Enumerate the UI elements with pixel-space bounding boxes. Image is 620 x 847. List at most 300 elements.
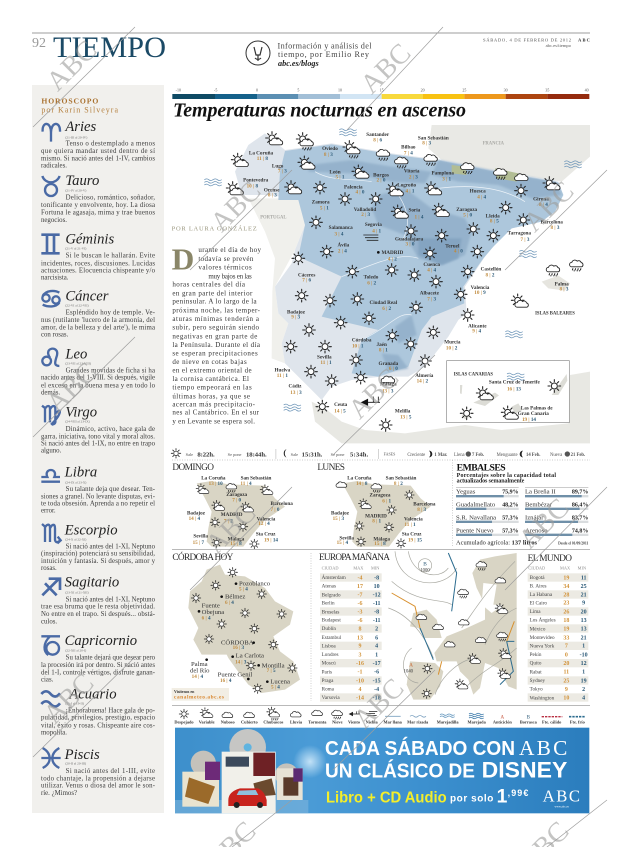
city labels north: Orense [264,188,280,194]
town labels: Palma [191,661,208,668]
table header: MAX [560,565,571,570]
legend labels: Variable [199,719,215,724]
entry: Sagitario: trae esa bruma que le resta objetividad. [41,604,155,611]
table rows: 6 [375,635,378,641]
reservoir bars: La Breña II [525,489,556,496]
city labels: Barcelona [413,502,436,508]
entry: Libra: (24-IX al 23-X) [65,480,86,484]
subheading: Porcentajes sobre la capacidad total [457,473,556,479]
table rows: 1 [582,644,585,650]
legend icons: B [527,715,531,720]
pressure labels: A [409,662,413,668]
table rows: 0 [565,652,568,658]
table rows: 11 [564,670,569,676]
article text: aturas mínimas tenderán a [172,315,259,323]
table rows: 1 [582,670,585,676]
table rows: 20 [581,609,587,615]
table rows: 13 [357,635,363,641]
city labels: 8 | 1 [372,519,382,525]
watermarks: ABC [518,176,580,238]
table rows: Ámsterdam [322,573,346,581]
reservoir bars: 74,8% [572,528,588,534]
date line: ABC [578,38,590,42]
ad headline [325,736,568,783]
city labels: Badajoz [187,510,206,516]
panel: Domingo forecast [172,463,293,549]
land: France [428,125,590,182]
table rows: 10 [563,696,569,702]
reservoir bars: 83,7% [572,516,588,522]
panel: Europa mañana table [319,551,390,702]
table rows: Washington [530,695,555,701]
town labels: 6 | 4 [225,600,234,606]
article text: peninsular. A lo largo de la [172,298,257,306]
ad offer [326,786,528,807]
entry: Géminis: incidentes, roces, discusiones. Lucidas [41,260,155,267]
town labels: del Río [190,668,210,675]
legend icons [179,707,585,720]
town labels: Lucena [270,678,290,685]
table rows: 10 [374,584,380,590]
city labels [331,475,436,547]
table rows: Dublín [322,626,336,632]
city labels: Sta Cruz [402,532,422,538]
city labels south: Almería [415,373,434,379]
city labels: 7 | 2 [224,518,233,524]
table rows: 26 [563,609,569,615]
panel: Disney advertisement [175,728,589,813]
city labels: 8 | 2 [394,481,403,487]
temperature colour scale [172,87,589,99]
entry: Aries: mismo. Si nació antes del 1-IV, cambios [41,155,155,162]
city labels north: 7 | 4 [404,150,413,156]
entry: Piscis: ríe. ¿Mimos? [41,790,77,797]
table header: MIN [578,565,587,570]
legend labels: Cubierto [241,719,258,724]
heading: DOMINGO [172,463,214,473]
city labels: 13 | 10 [209,481,223,487]
city labels north: Guadalajara [395,237,423,243]
city labels north: Burgos [373,173,389,179]
city labels: La Coruña [201,475,226,481]
entry: Tauro: Tauro [65,173,99,189]
inset: Canary Islands [447,361,569,423]
moon phases: 21 Feb. [571,453,585,458]
sun and moon bar [171,449,585,459]
city labels south: Castellón [481,266,501,272]
legend labels: Fte. cálido [542,719,561,724]
entry: Aries: Tenso o destemplado a menos [66,140,155,147]
city labels south: 8 | 3 [560,287,569,293]
city labels north: 8 | 4 [539,202,548,208]
map [197,481,285,547]
entry: Sagitario: Si nació antes del 1-XI, Neptuno [66,596,156,603]
entry: Escorpio: Si nació antes del 1-XI, Neptuno [66,544,156,551]
city labels south: Ciudad Real [370,300,398,306]
city labels north: 4 | 0 [356,189,365,195]
table rows: 13 [581,618,587,624]
entry: Escorpio: intuición y fantasía. Si después, amor y [41,558,156,565]
city labels: MADRID [365,513,387,519]
ad headline: DISNEY [482,758,568,783]
entry: Piscis: utilizar. Venus o diosa del amor le son- [41,783,156,790]
city labels north: 5 | 1 [320,205,329,211]
temperature colour scale: 15 [380,87,384,92]
city labels south: Valencia [471,285,490,291]
city labels north: 8 | 6 [373,138,383,144]
entry: Géminis: actuaciones. Elocuencia chispeante y/o [41,268,156,275]
table rows: Sydney [530,678,546,684]
city labels north: 3 | 1 [442,177,452,183]
entry: Leo: nacido antes del 1-VIII. Si después, vigile [41,375,155,382]
reservoir bars: Bembézar [525,501,553,508]
entry: Acuario: (21-I al 19-II) [65,701,84,705]
article text: de nieve en cotas bajas [172,358,247,366]
table rows: 19 [563,575,569,581]
table rows: Varsovia [322,695,340,701]
weather legend [174,707,585,724]
ad offer: Libro + CD Audio [326,789,447,806]
entry: Acuario: vital, éxito y rosas. Chispeante aire cos- [41,722,156,729]
city labels south: MADRID [381,250,403,256]
city labels: Málaga [228,536,245,542]
article text: todavía se prevén [198,255,254,263]
inset: Canary Islands: Santa Cruz de Tenerife [489,380,540,386]
reservoir bars: 48,2% [502,502,519,508]
table rows: B. Aires [530,584,547,590]
city labels north: La Coruña [249,150,274,156]
legend labels: Nieve [332,719,343,724]
table header: MIN [371,565,380,570]
table rows: La Habana [530,592,553,598]
reservoir bars: Puente Nuevo [456,527,494,534]
temperature colour scale: 10 [338,87,342,92]
arrow: wind [362,397,380,405]
table rows: México [530,626,546,632]
heading: CÓRDOBA HOY [172,551,234,563]
city labels south: 11 | 1 [320,360,332,366]
entry: Virgo: Dinámico, activo, hace gala de [66,426,155,433]
city labels north: Soria [408,208,421,214]
city labels north: 4 | 1 [406,188,415,194]
table rows: 9 [565,687,568,693]
table rows: Los Ángeles [530,616,556,624]
table rows: Montevideo [530,635,555,641]
temperature zone: main [278,144,563,377]
temperature colour scale: 20 [421,87,425,92]
city labels north: Segovia [365,222,382,228]
table rows: 9 [582,601,585,607]
city labels: Málaga [373,536,390,542]
reservoir bars: 57,3% [502,528,519,534]
city labels north: 10 | 8 [247,183,258,189]
entry: Virgo [41,405,156,455]
date line [483,38,590,48]
city labels south: 9 | 3 [291,315,301,321]
city labels: 15 | 8 [374,541,386,547]
ad headline: CADA SÁBADO CON [325,737,515,760]
city labels: 11 | 4 [240,481,252,487]
table rows: 2 [582,687,585,693]
callout: website: canalmeteo.abc.es [174,695,224,701]
city labels north: Palencia [344,184,363,190]
table rows: 12 [581,661,587,667]
table rows: 20 [563,661,569,667]
entry: Aries: que quiera mandar usted dentro de sí [41,148,155,155]
article text: nes al Cantábrico. En el sur [172,409,260,417]
table header: CIUDAD [528,565,545,570]
city labels south: 4 | 2 [388,256,397,262]
table rows: Rabat [530,669,542,675]
city labels: 14 | 4 [189,516,200,522]
city labels north: 8 | 3 [551,225,560,231]
entry: Sagitario [41,575,156,625]
city labels north: Ávila [337,241,350,249]
icon: weather blog seal [246,41,270,65]
table rows: 8 [358,626,361,632]
entry: Capricornio: Su talante dejará que desear pero [66,655,156,662]
city labels south: 13 | 3 [290,390,302,396]
watermarks: ABC [41,357,103,419]
city labels north: 2 | 3 [409,174,418,180]
city labels south: Albacete [420,290,440,296]
article text: últimas horas, ya que se [172,392,250,400]
inset: Canary Islands: 19 | 14 [522,417,536,423]
city labels south: Alicante [468,323,487,329]
city labels north: Girona [533,197,549,203]
accumulated rainfall note: Acumulado agrícola: 137 litros [456,539,538,546]
page header [32,32,590,68]
city labels north: Bilbao [401,144,416,150]
legend labels: Mar llana [384,719,403,724]
blog promo text: abc.es/blogs [278,59,319,68]
reservoir bars [456,489,588,536]
entry: Leo: Leo [64,346,87,362]
city labels: 19 | 14 [264,538,278,544]
city labels north: Barcelona [541,219,563,225]
table rows: -7 [357,593,362,599]
entry: Libra: Su talante deja que desear. Ten- [66,486,156,493]
sunrise and sunset: 18:44h. [246,451,267,458]
city labels: 14 | 8 [356,481,368,487]
entry: Tauro: Delicioso, romántico, soñador, [66,195,155,202]
city labels north: Tarragona [508,230,531,236]
weather icons north [204,129,582,242]
town labels: Obejuna [202,609,224,616]
weather icons [196,484,273,549]
table rows: Budapest [322,618,341,624]
table rows: 23 [563,601,569,607]
article [172,225,261,426]
horoscope heading: HOROSCOPO [41,96,99,105]
legend labels [174,719,585,724]
town labels: Puente Genil [218,672,252,679]
ad offer: 1 [497,786,508,807]
moon phases: Nueva [550,453,562,458]
table rows: Berlín [322,601,335,607]
entry: Capricornio: Capricornio [65,633,137,649]
accumulated rainfall note [456,539,589,546]
city labels south: Ceuta [334,402,348,408]
entry: Cáncer: Cáncer [65,289,109,305]
city labels north: 4 | 0 [454,249,463,255]
city labels south: 4 | 4 [427,268,437,274]
sunrise and sunset: 5:34h. [350,451,369,458]
city labels south: 7 | 6 [302,278,312,284]
table rows: El Cairo [530,600,547,606]
city labels north: Salamanca [329,225,353,231]
sunrise and sunset: Sale [291,452,298,457]
blog promo text [278,42,372,68]
table rows [530,575,588,702]
table rows: Praga [322,678,334,684]
city labels south: Cuenca [423,262,440,268]
land: Africa [312,372,590,443]
city labels north: PORTUGAL [260,215,286,220]
table rows: 13 [581,627,587,633]
table rows: Londres [322,652,339,658]
legend labels: Despejado [174,719,194,724]
table rows [322,573,381,701]
entry: Leo: demás. [41,389,60,396]
horoscope heading [41,96,118,114]
legend labels: Nuboso [221,719,235,724]
reservoir bars: Arenoso [525,527,548,534]
city labels: Zaragoza [370,493,391,499]
table rows: Lisboa [322,643,336,649]
watermarks: ABC [41,35,103,97]
panel: Embalses [456,462,589,546]
temperature colour scale: -10 [176,87,181,92]
table rows: 33 [563,635,569,641]
isobars [388,551,517,695]
reservoir bars: Iznájar [525,515,544,522]
city labels south: Toledo [364,274,379,280]
city labels north [243,132,563,255]
table rows: 4 [582,696,585,702]
town labels: 5 | 4 [239,587,248,593]
table rows: Tokyo [530,687,543,693]
city labels: Sta Cruz [256,532,276,538]
town labels: 14 | 3 [235,660,247,666]
banner background [175,728,589,813]
city labels north: 5 | 1 [336,174,345,180]
town labels: 7 | 5 [267,668,276,674]
article text: en el extremo oriental de [172,366,252,374]
ad headline: UN CLÁSICO DE [325,760,475,783]
city labels south: 8 | 1 [379,348,388,354]
inset: Canary Islands: ISLAS CANARIAS [454,372,493,377]
entry: Sagitario: No entre en el trapo. Si después... obstá- [41,611,156,618]
table stripes [320,573,382,702]
entry: Cáncer [41,289,156,339]
entry: Sagitario: culos. [41,618,57,625]
entry: Leo: el exceso en la buena mesa y en todo lo [41,382,156,389]
legend labels: Mar rizada [407,719,429,724]
weather icons [191,568,297,693]
entry: Aries [41,119,155,170]
sunrise and sunset: Se pone [331,452,345,457]
table rows: -8 [374,610,379,616]
watermarks: ABC [343,363,405,425]
city labels north: León [329,169,341,175]
entry: Tauro [41,173,155,224]
city labels north: Santander [366,132,390,138]
city labels north: 5 | 0 [463,213,473,219]
entry: Acuario: mopolita. [41,730,67,737]
date line: abc.es/tiempo [546,43,572,48]
city labels: 7 | 0 [232,498,242,504]
city labels north: 3 | 4 [335,231,344,237]
map [342,481,431,547]
city labels south: 10 | 2 [446,345,458,351]
city labels: Badajoz [331,510,350,516]
town labels: 5 | 4 [271,685,280,691]
panel: horoscope sidebar [32,85,164,813]
temperature colour scale: 35 [545,87,549,92]
table rows: -17 [373,661,381,667]
city labels north: 7 | 3 [521,237,530,243]
city labels north: 2 | 4 [338,249,347,255]
legend labels: Marejada [468,719,487,724]
city labels: MADRID [221,512,243,518]
city labels north: 4 | 4 [477,194,487,200]
pressure labels: 1040 [404,670,414,675]
city labels south: Melilla [395,408,411,414]
table rows: -8 [374,575,379,581]
city labels north: Zamora [312,199,330,205]
headline: Temperaturas nocturnas en ascenso [173,100,466,122]
watermarks: ABC [200,498,262,560]
map: Spain forecast [204,125,590,443]
table rows: -11 [373,601,380,607]
land: Portugal [248,198,305,363]
city labels north: 2 | 3 [361,212,371,218]
entry: Géminis: Si le buscan le hallarán. Evite [66,253,155,260]
table rows: Nueva York [530,643,555,649]
table rows: Quito [530,661,542,667]
entry: Virgo: alguno. [41,448,62,455]
table rows: 2 [375,626,378,632]
entry: Tauro: Fortuna le agasaja, mima y trae buenos [41,210,155,217]
town labels: 16 | 3 [233,645,245,651]
city labels: San Sebastián [386,475,417,481]
legend labels: Viento [348,719,360,724]
city labels south: 7 | 3 [427,297,437,303]
table rows: 18 [563,618,569,624]
entry: Piscis: todo chantaje, la propensión a dejarse [41,775,155,782]
city labels south: 6 | 0 [389,366,398,372]
city labels: Valencia [257,517,276,523]
town labels: Pozoblanco [239,581,271,588]
article text: negativas en gran parte de [172,332,257,340]
table header [322,565,380,570]
moon phases: FASES [384,452,395,457]
table rows: -4 [357,575,362,581]
sunrise and sunset [186,449,379,459]
entry: Cáncer: nus (rutilante 'lucero de la armonía, del [41,317,155,324]
city labels south: Cádiz [289,383,302,389]
table rows: Bogotá [530,575,545,581]
watermarks: ABC [205,176,267,238]
legend labels: Marejadilla [437,719,459,724]
city labels north: 4 | 1 [372,229,382,235]
city labels north: Lugo [272,163,284,169]
weather fronts [392,553,514,685]
entry: Acuario [41,686,156,737]
city labels south: 6 | 2 [382,306,392,312]
legend labels: Fte. frío [570,719,585,724]
